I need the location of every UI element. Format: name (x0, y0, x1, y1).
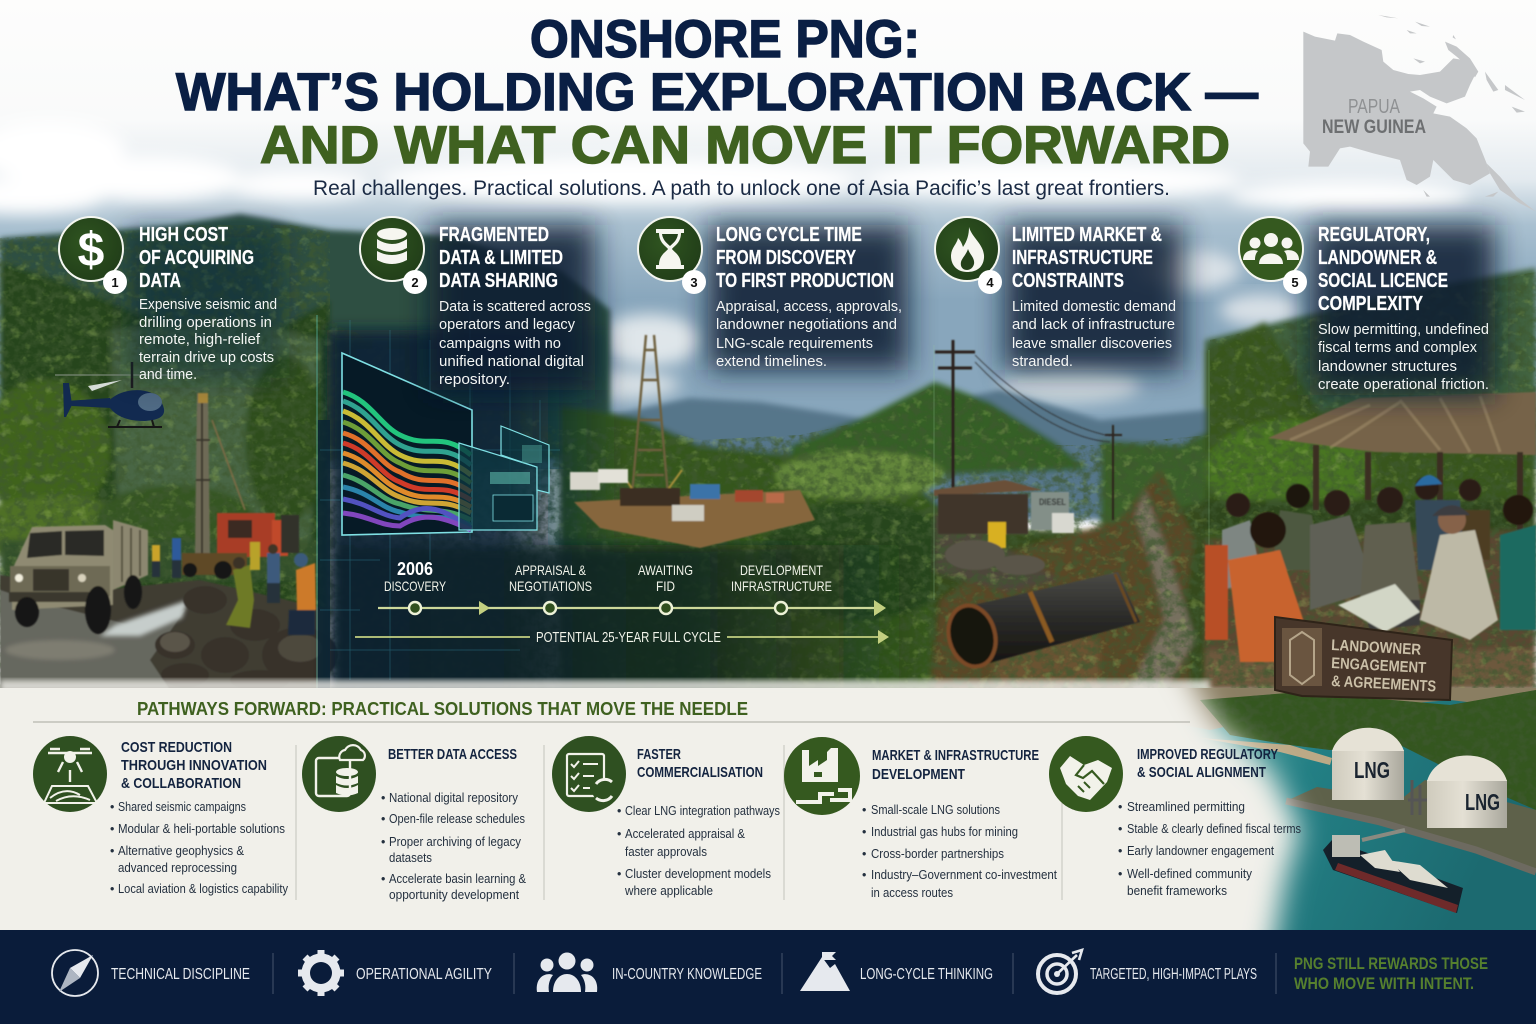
body text: operators and legacy (439, 316, 575, 333)
heading (1137, 746, 1278, 781)
icon: mountain flag (800, 952, 850, 991)
icon: dollar: $ (78, 224, 105, 277)
body text: landowner structures (1318, 358, 1457, 375)
heading (121, 739, 267, 792)
title: WHAT’S HOLDING EXPLORATION BACK — (176, 63, 1258, 122)
icon: people (1239, 217, 1307, 294)
heading: pathways forward: PATHWAYS FORWARD: PRACTICAL SOLUTIONS THAT MOVE THE NEEDLE (137, 699, 748, 719)
text backdrops (130, 225, 1495, 395)
heading (139, 224, 254, 292)
body text (1318, 321, 1489, 393)
illustration: LNG terminal (1173, 688, 1536, 930)
timeline arrow with milestones (378, 600, 886, 616)
body text: drilling operations in (139, 314, 272, 331)
bullet list (1118, 800, 1301, 898)
bullet list: in access routes (871, 886, 953, 900)
icon: target (1038, 950, 1082, 993)
panel: solution 5 regulatory alignment (1049, 736, 1301, 898)
bullet list: • (862, 803, 866, 817)
map: Papua New Guinea: PAPUA (1348, 96, 1401, 118)
cycle duration bar: POTENTIAL 25-YEAR FULL CYCLE (536, 630, 721, 646)
LNG carrier ship (1323, 830, 1463, 913)
seated people (1205, 475, 1536, 662)
foliage texture (0, 225, 1536, 690)
road and ground mid right (930, 500, 1215, 690)
illustration: seismic hologram display (320, 300, 560, 680)
panel: solution 1 cost reduction (33, 736, 289, 896)
body text: leave smaller discoveries (1012, 335, 1172, 352)
icon: hourglass: 3 (690, 275, 698, 290)
heading: & SOCIAL ALIGNMENT (1137, 764, 1266, 781)
bullet list: Proper archiving of legacy (389, 835, 522, 849)
bullet list: Early landowner engagement (1127, 844, 1274, 858)
dark digital panel background (327, 330, 927, 700)
label: technical discipline: TECHNICAL DISCIPLINE (111, 966, 250, 983)
bullet list: • (862, 847, 866, 861)
bullet list: • (110, 882, 114, 896)
heading: DATA SHARING (439, 270, 558, 292)
label: long-cycle thinking: LONG-CYCLE THINKING (860, 966, 993, 983)
heading: HIGH COST (139, 224, 228, 246)
sign: landowner engagement (1275, 617, 1452, 700)
map on ground (1338, 584, 1420, 632)
heading (637, 746, 763, 781)
bullet list: • (381, 872, 385, 886)
icon: gear (298, 950, 344, 996)
illustration: drilling rig and camp (570, 335, 815, 548)
heading (872, 747, 1039, 783)
icon: database: 2 (411, 275, 419, 290)
bullet list: • (617, 827, 621, 841)
body text (1012, 298, 1176, 370)
heading: COMMERCIALISATION (637, 764, 763, 781)
icon: flame (935, 217, 1002, 294)
heading: COMPLEXITY (1318, 293, 1424, 315)
body text: repository. (439, 371, 510, 388)
heading: FRAGMENTED (439, 224, 549, 246)
body text: campaigns with no (439, 335, 561, 352)
cycle duration bar (355, 630, 889, 646)
bullet list: Streamlined permitting (1127, 800, 1245, 814)
bullet list (862, 803, 1057, 900)
body text: unified national digital (439, 353, 584, 370)
icon: dollar: 1 (111, 275, 119, 290)
icon: compass (52, 950, 98, 996)
heading: SOCIAL LICENCE (1318, 270, 1448, 292)
timeline labels: FID (656, 578, 675, 594)
body text (716, 298, 902, 370)
bullet list: Cluster development models (625, 867, 771, 881)
bullet list: Alternative geophysics & (118, 844, 245, 858)
heading: LIMITED MARKET & (1012, 224, 1162, 246)
fade into panel (1130, 688, 1320, 930)
title: AND WHAT CAN MOVE IT FORWARD (260, 116, 1230, 175)
background: sky and clouds (0, 0, 1536, 469)
panel: solution 4 market and infrastructure (784, 737, 1057, 900)
panel: solution 2 better data access (302, 736, 527, 902)
icon: hourglass (638, 217, 706, 294)
bullet list: • (381, 835, 385, 849)
icon: people: 5 (1291, 275, 1299, 290)
icon: handshake (1049, 736, 1123, 812)
icon: database (360, 217, 427, 294)
panel: challenge 4 market constraints (935, 217, 1176, 370)
heading: IMPROVED REGULATORY (1137, 746, 1278, 763)
timeline labels (384, 559, 832, 594)
illustration: fuel station, power poles and pipeline: DIESEL (1039, 497, 1066, 507)
callout (1294, 954, 1488, 993)
left river and rocks (0, 575, 338, 690)
bullet list: faster approvals (625, 845, 707, 859)
illustration: helicopter (55, 362, 190, 427)
bullet list: • (1118, 844, 1122, 858)
body text: and time. (139, 366, 197, 383)
timeline (355, 559, 889, 646)
panel: challenge 3 long cycle time (638, 217, 902, 370)
body text: create operational friction. (1318, 376, 1489, 393)
bullet list (617, 804, 780, 898)
bullet list: opportunity development (389, 888, 519, 902)
panel: solutions background (0, 680, 1536, 930)
footer bar (0, 930, 1536, 1024)
timeline labels: DEVELOPMENT (740, 562, 823, 578)
heading (1318, 224, 1448, 315)
panel: challenge 2 fragmented data (360, 217, 591, 388)
panel: solution 3 faster commercialisation (552, 736, 780, 898)
bullet list: • (862, 825, 866, 839)
bullet list: benefit frameworks (1127, 884, 1227, 898)
label: operational agility: OPERATIONAL AGILITY (356, 966, 492, 983)
bullet list (381, 791, 527, 902)
shore rocks and hillside (1130, 688, 1536, 730)
body text: terrain drive up costs (139, 349, 274, 366)
heading: DATA (139, 270, 181, 292)
bullet list: Modular & heli-portable solutions (118, 822, 285, 836)
callout: WHO MOVE WITH INTENT. (1294, 974, 1474, 993)
blue mountains centre (590, 390, 1205, 520)
left trees (0, 380, 110, 520)
bullet list (110, 800, 289, 896)
body text: LNG-scale requirements (716, 335, 873, 352)
heading: FASTER (637, 746, 681, 763)
bullet list: • (617, 867, 621, 881)
bullet list: • (617, 804, 621, 818)
map: Papua New Guinea: NEW GUINEA (1322, 117, 1426, 138)
icon: people (537, 952, 597, 992)
bullet list: where applicable (624, 884, 713, 898)
body text: Slow permitting, undefined (1318, 321, 1489, 338)
heading: FROM DISCOVERY (716, 247, 857, 269)
bullet list: datasets (389, 851, 432, 865)
valley haze behind heli (110, 320, 320, 540)
timeline labels: DISCOVERY (384, 578, 446, 594)
callout: PNG STILL REWARDS THOSE (1294, 954, 1488, 973)
sign: landowner engagement: ENGAGEMENT (1331, 655, 1427, 677)
heading: LANDOWNER & (1318, 247, 1437, 269)
panel: challenge 1 high cost (59, 217, 277, 383)
heading: & COLLABORATION (121, 775, 241, 792)
bullet list: • (1118, 867, 1122, 881)
map: Papua New Guinea (1303, 15, 1536, 212)
heading: REGULATORY, (1318, 224, 1430, 246)
bullet list: • (110, 822, 114, 836)
title: ONSHORE PNG: (530, 10, 920, 69)
icon: dollar (59, 217, 127, 294)
heading: DATA & LIMITED (439, 247, 563, 269)
bullet list: Small-scale LNG solutions (871, 803, 1000, 817)
body text: Limited domestic demand (1012, 298, 1176, 315)
bullet list: National digital repository (389, 791, 519, 805)
timeline labels: NEGOTIATIONS (509, 578, 592, 594)
subtitle: Real challenges. Practical solutions. A path to unlock one of Asia Pacific’s last great frontiers. (313, 177, 1170, 200)
illustration: landowner meeting under thatched hut (1205, 392, 1536, 662)
heading (716, 224, 894, 292)
label: in-country knowledge: IN-COUNTRY KNOWLEDGE (612, 966, 762, 983)
timeline labels: INFRASTRUCTURE (731, 578, 832, 594)
bullet list: • (862, 868, 866, 882)
label: targeted plays: TARGETED, HIGH-IMPACT PLAYS (1090, 966, 1257, 983)
bullet list: Well-defined community (1127, 867, 1253, 881)
bullet list: Open-file release schedules (389, 812, 525, 826)
bullet list: • (1118, 800, 1122, 814)
bullet list: • (110, 800, 114, 814)
body text: landowner negotiations and (716, 316, 897, 333)
heading: MARKET & INFRASTRUCTURE (872, 747, 1039, 764)
heading: THROUGH INNOVATION (121, 757, 267, 774)
icon: drone (33, 736, 107, 812)
bullet list: Stable & clearly defined fiscal terms (1127, 822, 1301, 836)
sign: landowner engagement: LANDOWNER (1331, 637, 1422, 659)
body text: Data is scattered across (439, 298, 591, 315)
panel: challenge 5 regulatory complexity (1239, 217, 1489, 393)
body text: remote, high-relief (139, 331, 261, 348)
body text: fiscal terms and complex (1318, 339, 1477, 356)
timeline labels: APPRAISAL & (515, 562, 587, 578)
right sky hills foliage (1205, 268, 1536, 420)
heading: INFRASTRUCTURE (1012, 247, 1153, 269)
LNG tanks (1332, 728, 1507, 828)
heading (1012, 224, 1162, 292)
far ridge left (0, 214, 610, 460)
background: landscape photo collage (0, 214, 1536, 700)
LNG tanks: LNG (1465, 789, 1500, 815)
bullet list: Clear LNG integration pathways (625, 804, 780, 818)
timeline labels: 2006 (397, 559, 433, 579)
body text: Expensive seismic and (139, 296, 277, 313)
body text: extend timelines. (716, 353, 827, 370)
heading: LONG CYCLE TIME (716, 224, 862, 246)
body text (139, 296, 277, 383)
bullet list: Shared seismic campaigns (118, 800, 246, 814)
icon: monitor, cloud and database (302, 736, 376, 812)
timeline labels: AWAITING (638, 562, 693, 578)
body text: and lack of infrastructure (1012, 316, 1175, 333)
illustration: fuel station, power poles and pipeline (934, 340, 1140, 672)
sign: landowner engagement: & AGREEMENTS (1331, 673, 1437, 695)
bullet list: • (110, 844, 114, 858)
causeway and rock wall (1286, 780, 1536, 872)
bullet list: • (381, 812, 385, 826)
title (176, 10, 1258, 175)
bullet list: advanced reprocessing (118, 861, 237, 875)
body text (439, 298, 591, 388)
LNG tanks: LNG (1354, 757, 1390, 783)
bullet list: Accelerated appraisal & (625, 827, 746, 841)
body text: Appraisal, access, approvals, (716, 298, 902, 315)
bullet list: Local aviation & logistics capability (118, 882, 289, 896)
bullet list: Cross-border partnerships (871, 847, 1004, 861)
icon: checklist and cycle (552, 736, 626, 812)
bullet list: Industry–Government co-investment (871, 868, 1057, 882)
heading: OF ACQUIRING (139, 247, 254, 269)
body text: stranded. (1012, 353, 1073, 370)
bullet list: • (1118, 822, 1122, 836)
heading: CONSTRAINTS (1012, 270, 1124, 292)
icon: factory and pipes (784, 737, 860, 815)
icon: flame: 4 (986, 275, 994, 290)
heading (439, 224, 563, 292)
bullet list: • (381, 791, 385, 805)
illustration: truck, drill and workers (9, 393, 316, 635)
heading: BETTER DATA ACCESS (388, 746, 517, 763)
bullet list: Industrial gas hubs for mining (871, 825, 1018, 839)
bullet list: Accelerate basin learning & (389, 872, 527, 886)
heading: TO FIRST PRODUCTION (716, 270, 894, 292)
heading: DEVELOPMENT (872, 766, 965, 783)
heading: COST REDUCTION (121, 739, 232, 756)
